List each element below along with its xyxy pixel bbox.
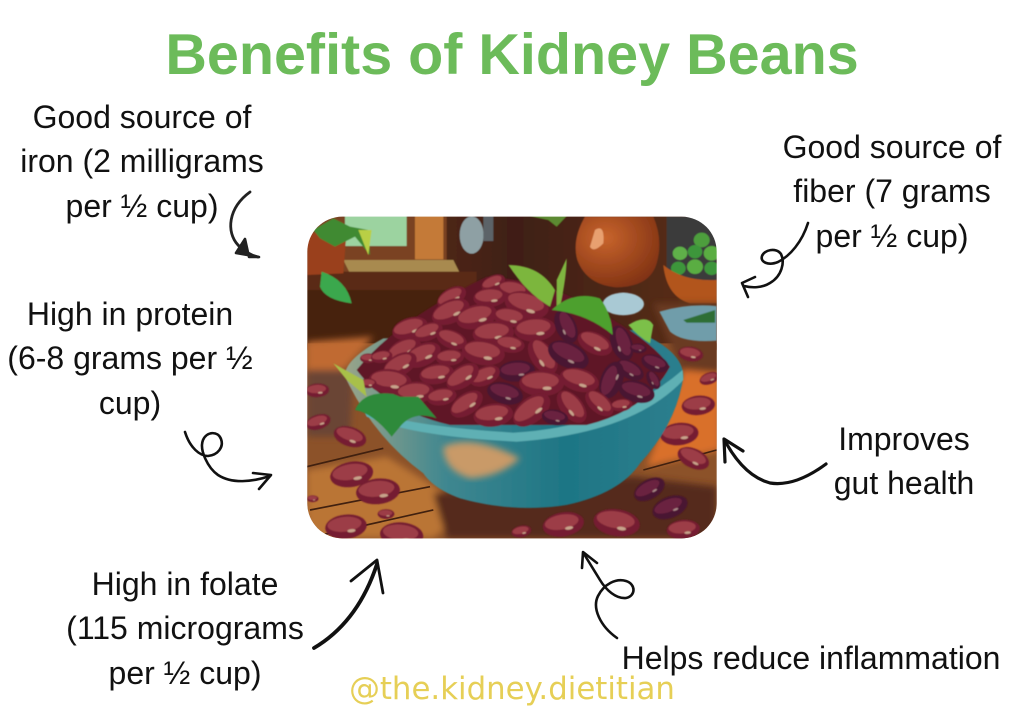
table [300,303,730,543]
clay pitcher [576,217,659,287]
text: protein benefit: High in protein [27,296,233,332]
text: protein benefit: cup) [99,385,161,421]
text: iron benefit [20,99,264,224]
watermark handle: @the.kidney.dietitian [349,671,675,707]
arrow: gut health to image [724,439,826,484]
window [307,216,477,347]
scattered beans [304,345,721,549]
potted plant [307,218,372,303]
herb dish [659,305,717,341]
text: protein benefit: (6-8 grams per ½ [7,340,253,376]
bean pile [357,271,671,433]
text: fiber benefit: per ½ cup) [816,218,968,254]
arrow: fiber to image [742,223,808,297]
text: gut health benefit: Improves [838,421,970,457]
text: inflammation benefit: Helps reduce inflammation [622,640,1000,676]
text: gut health benefit [834,421,974,501]
text: gut health benefit: gut health [834,465,974,501]
illustration: bowl of kidney beans [300,210,730,549]
text: folate benefit: (115 micrograms [66,610,304,646]
kitchen wall [300,210,730,350]
arrow: inflammation to image [582,552,634,638]
title: Benefits of Kidney Beans [165,23,859,87]
arrow: folate to image [314,560,383,648]
text: fiber benefit: fiber (7 grams [793,173,991,209]
text: iron benefit: iron (2 milligrams [20,143,264,179]
text: iron benefit: per ½ cup) [66,188,218,224]
text: folate benefit [66,566,304,691]
text: folate benefit: High in folate [92,566,278,602]
text: protein benefit [7,296,253,421]
arrow: protein to image [185,432,271,489]
arrow: iron to image [231,192,259,257]
text: fiber benefit: Good source of [783,129,1002,165]
text: iron benefit: Good source of [33,99,252,135]
bowl of green peas [663,217,720,303]
hanging ladle [460,216,567,254]
text: folate benefit: per ½ cup) [109,655,261,691]
small plate [603,293,644,315]
green leaves [333,258,653,437]
text: fiber benefit [783,129,1002,254]
background scene [300,210,730,350]
teal bowl [345,330,683,508]
